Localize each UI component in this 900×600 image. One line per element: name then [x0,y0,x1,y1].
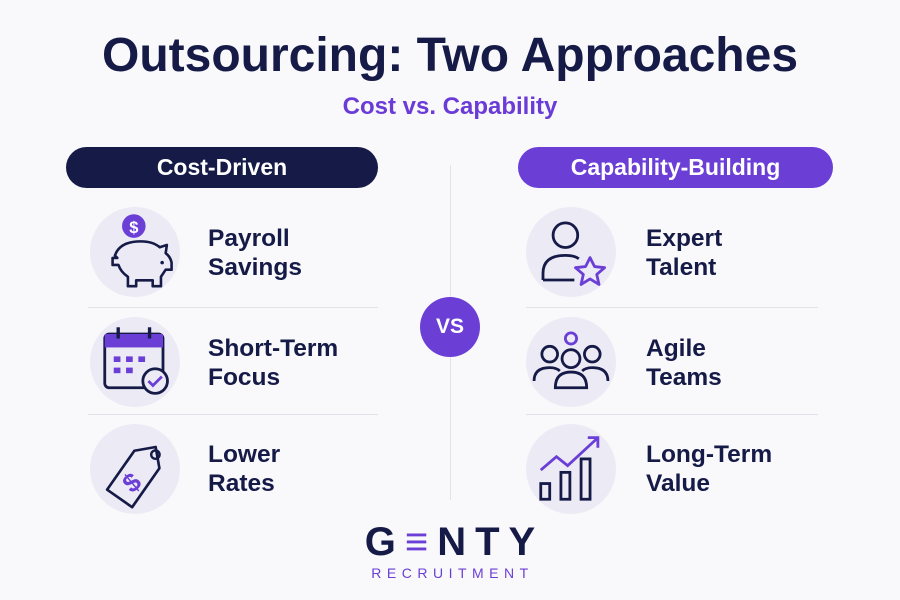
title: Outsourcing: Two Approaches [102,29,798,82]
icon: calendar [90,317,180,407]
text: long-term value: Value [646,470,710,497]
text: expert talent [646,225,722,281]
text: expert talent: Expert [646,225,722,252]
text: agile teams [646,335,722,391]
vs badge: VS [436,315,464,338]
text: payroll savings: Payroll [208,225,290,252]
text: lower rates: Rates [208,470,275,497]
icon: expert person star [526,207,616,297]
text: long-term value [646,441,772,497]
text: agile teams: Agile [646,335,706,362]
center divider line [450,165,451,500]
icon: price tag [90,424,180,514]
text: short-term focus [208,335,338,391]
text: payroll savings [208,225,302,281]
text: short-term focus: Short-Term [208,335,338,362]
logo: G≡NTY [365,520,544,564]
text: payroll savings: Savings [208,254,302,281]
icon: price tag: $ [117,466,147,499]
vs badge [420,297,480,357]
pill: cost-driven [66,147,378,188]
subtitle: Cost vs. Capability [343,93,557,120]
icon: piggy bank: $ [129,218,138,237]
pill: cost-driven: Cost-Driven [157,154,287,180]
logo: RECRUITMENT [371,565,534,581]
icon: team [526,317,616,407]
pill: capability-building: Capability-Building [571,154,780,180]
text: long-term value: Long-Term [646,441,772,468]
text: expert talent: Talent [646,254,716,281]
icon: growth chart [526,424,616,514]
text: lower rates: Lower [208,441,280,468]
text: short-term focus: Focus [208,364,280,391]
text: lower rates [208,441,280,497]
text: agile teams: Teams [646,364,722,391]
pill: capability-building [518,147,833,188]
icon: piggy bank [90,207,180,297]
